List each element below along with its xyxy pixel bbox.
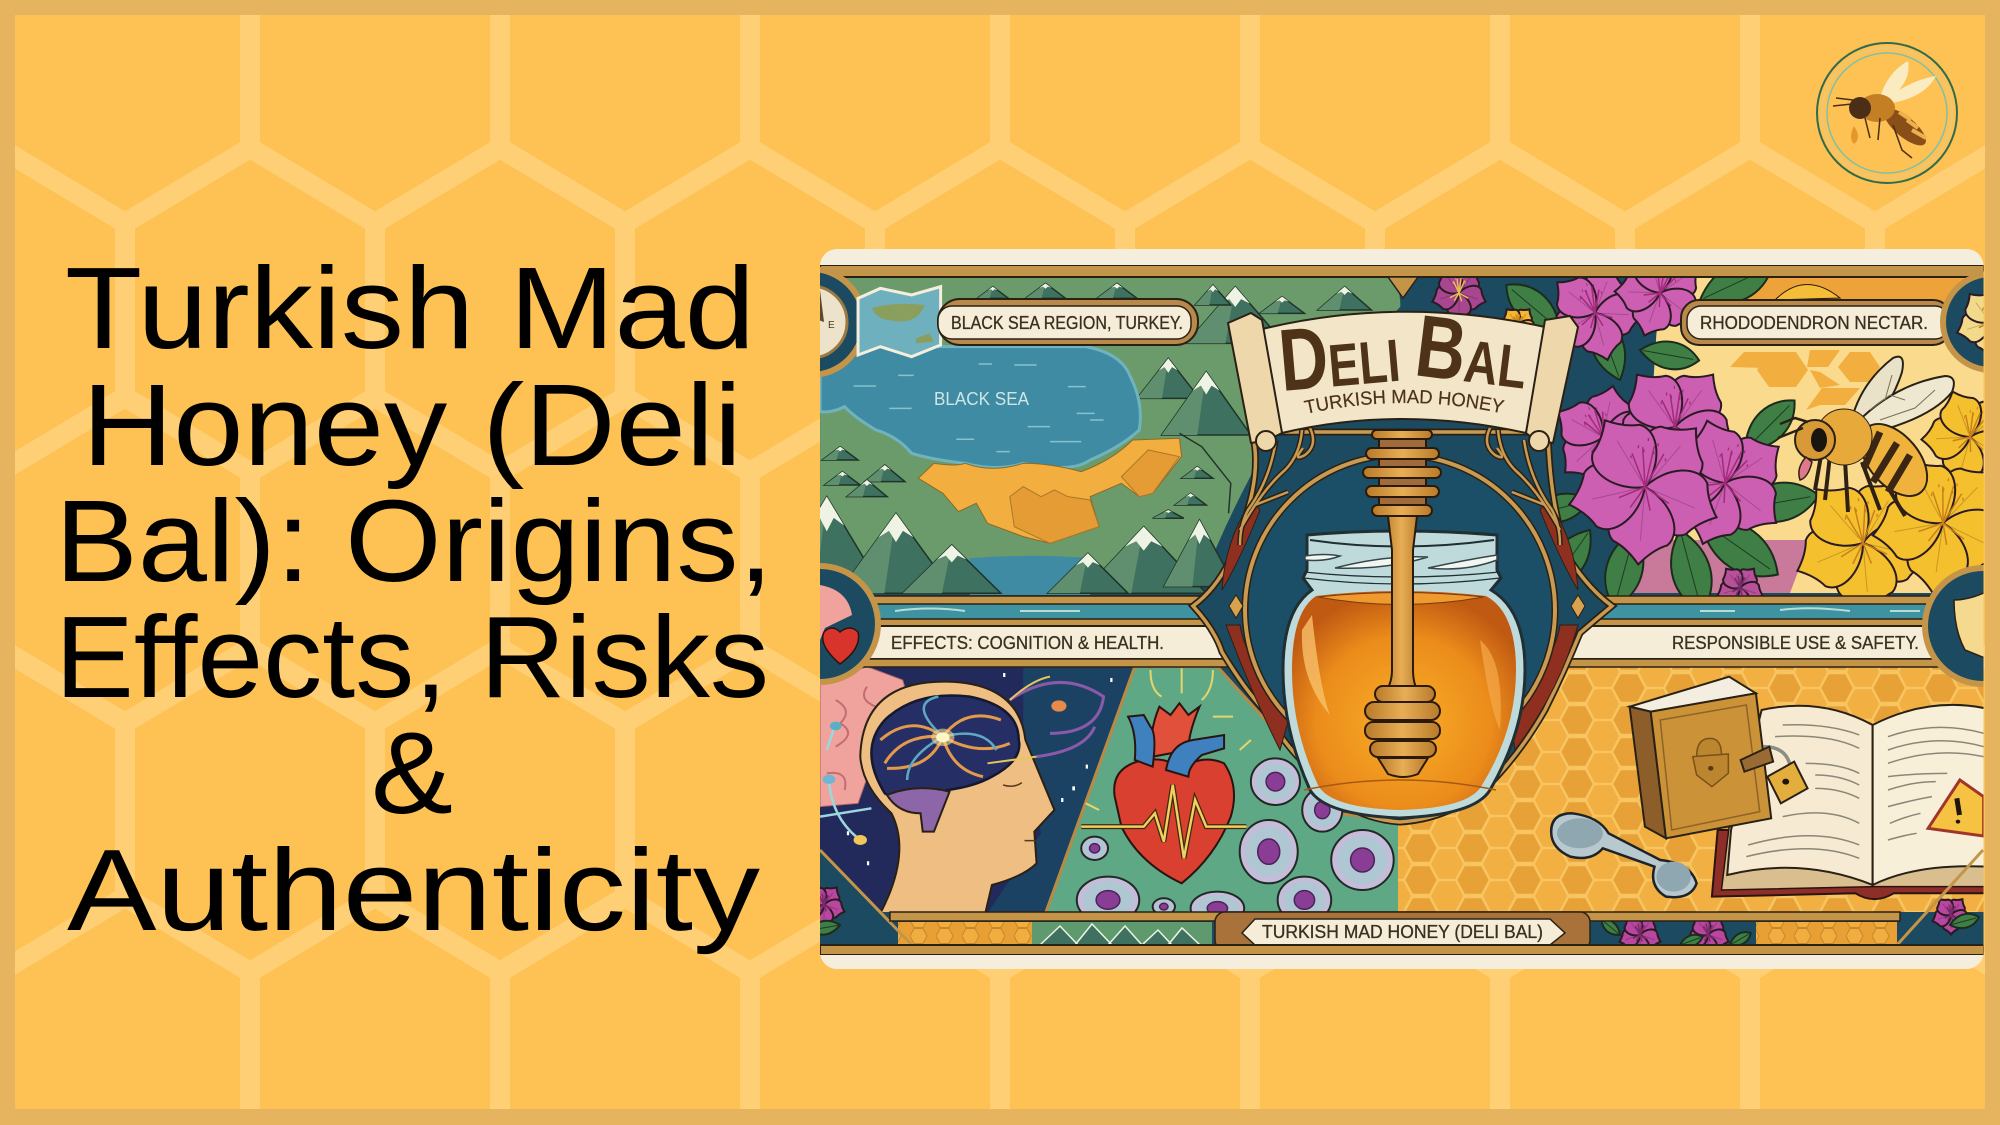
bee [1778, 357, 1954, 516]
top-right panel: rhododendron and bee [1431, 278, 1984, 596]
honeycomb panel: safety [1398, 667, 1984, 917]
banner subtitle: TURKISH MAD HONEY [1304, 390, 1505, 414]
artwork clipped [820, 265, 1984, 955]
leaves [1505, 278, 1816, 596]
corner medallion: compass: E [828, 320, 835, 331]
label: footer title: TURKISH MAD HONEY (DELI BAL) [1262, 922, 1543, 942]
title: Bal): Origins, [55, 476, 773, 606]
title: & [371, 708, 453, 838]
title: Effects, Risks [55, 592, 769, 722]
bottom frame bar [820, 945, 1984, 955]
medallion around jar [1193, 432, 1612, 822]
label: Rhododendron nectar: RHODODENDRON NECTAR. [1700, 313, 1928, 333]
title: Honey (Deli [82, 360, 742, 490]
heart and cells panel [1046, 667, 1400, 925]
label pill: rhododendron [1681, 300, 1951, 345]
brain panel [820, 667, 1135, 913]
corner medallion: compass [820, 266, 860, 378]
corner medallion: shield [1922, 565, 1984, 687]
illustration panel: Deli Bal poster [820, 249, 1984, 969]
label: Responsible use: RESPONSIBLE USE & SAFETY. [1672, 633, 1919, 653]
scroll banner [1228, 312, 1578, 451]
map panel: Black Sea region [769, 277, 1400, 595]
label: Effects: EFFECTS: COGNITION & HEALTH. [891, 633, 1164, 653]
corner medallion: brain and heart [820, 563, 881, 685]
banner title: Deli Bal: DELI [1275, 301, 1403, 410]
title: Turkish Mad [65, 243, 755, 373]
cream panel [820, 249, 1984, 969]
label: Black Sea: BLACK SEA [934, 389, 1029, 409]
top frame bar [820, 265, 1984, 277]
ornamental scrolls under banner [1240, 428, 1560, 545]
middle bands: teal and gold [820, 596, 1984, 667]
icon: folded map [858, 287, 941, 357]
title: Authenticity [67, 825, 760, 955]
honey jar [1283, 531, 1525, 818]
center notch at top [1388, 277, 1418, 298]
book, spoon, warning [1551, 677, 1986, 899]
corner medallion: flower [1940, 272, 1984, 372]
flowers: pink azalea and yellow [1431, 278, 1984, 596]
label: Black Sea Region: BLACK SEA REGION, TURKEY. [951, 313, 1183, 333]
honey dipper [1363, 430, 1441, 777]
banner title: Deli Bal [1281, 316, 1524, 391]
bottom ornamental strip [820, 849, 1984, 944]
banner title: Deli Bal: BAL [1411, 296, 1534, 408]
label pill: black sea [938, 299, 1198, 345]
